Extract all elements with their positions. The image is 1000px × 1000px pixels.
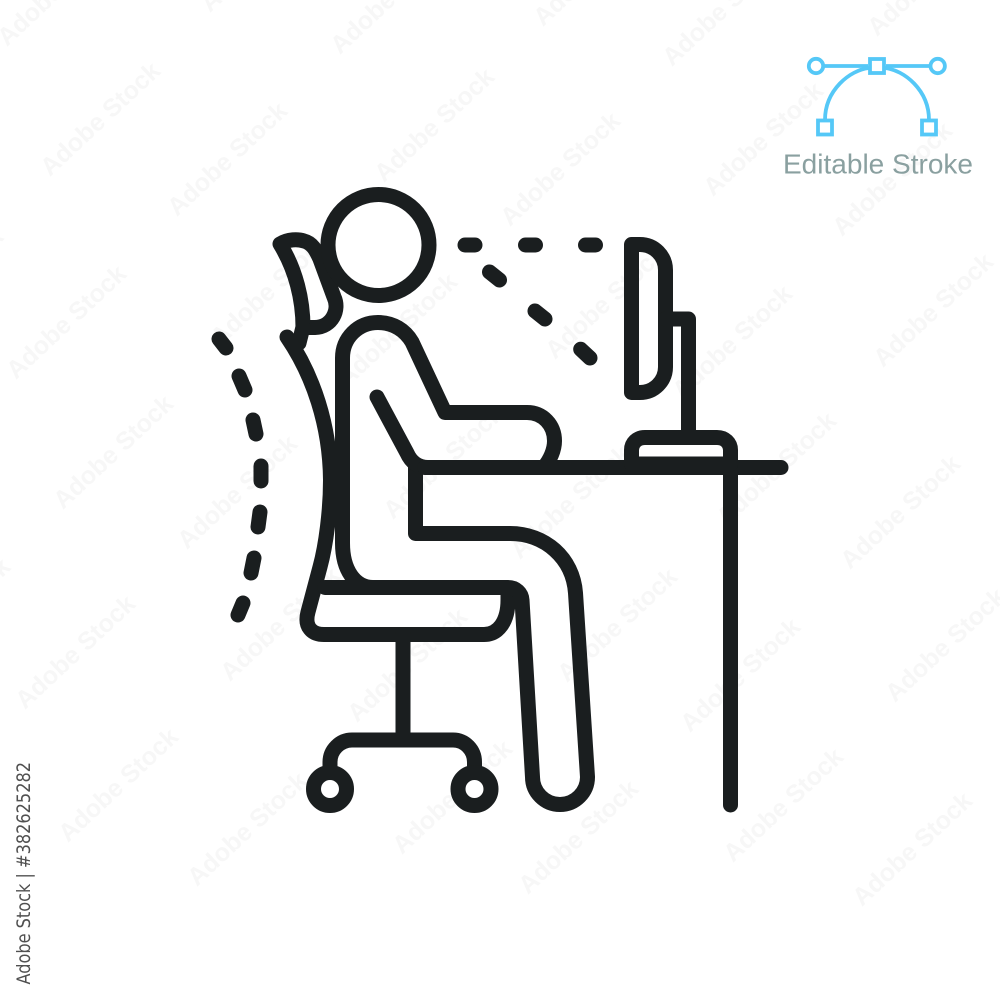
icon: monitor base xyxy=(632,438,730,464)
dashed line: horizontal eye level xyxy=(465,238,596,252)
icon: chair back and seat xyxy=(287,337,508,634)
icon: person seated at desk with good posture xyxy=(219,194,781,806)
icon: chair pole xyxy=(396,634,410,740)
icon: hair ponytail xyxy=(280,240,336,328)
repeating diagonal watermark: Adobe Stock xyxy=(868,248,999,372)
icon: torso and upper arm xyxy=(342,322,554,588)
right handle circle xyxy=(930,59,945,73)
icon: editable stroke bezier symbol xyxy=(809,59,945,134)
repeating diagonal watermark: Adobe Stock xyxy=(711,407,842,531)
repeating diagonal watermark: Adobe Stock xyxy=(332,268,463,392)
repeating diagonal watermark: Adobe Stock xyxy=(342,603,473,727)
left handle circle xyxy=(809,59,823,73)
repeating diagonal watermark: Adobe Stock xyxy=(35,57,166,181)
repeating diagonal watermark: Adobe Stock xyxy=(667,280,798,404)
icon: head xyxy=(328,194,429,296)
icon: monitor screen xyxy=(632,244,666,392)
repeating diagonal watermark: Adobe Stock xyxy=(172,430,303,554)
icon: hair to chair joint xyxy=(299,327,303,343)
top anchor square xyxy=(870,59,884,73)
repeating diagonal watermark: Adobe Stock xyxy=(162,97,293,221)
icon: chair base xyxy=(330,740,474,772)
icon: monitor stand xyxy=(666,319,688,438)
icon: right wheel xyxy=(458,772,491,806)
left anchor square xyxy=(818,120,832,134)
repeating diagonal watermark: Adobe Stock xyxy=(53,723,184,847)
repeating diagonal watermark: Adobe Stock xyxy=(205,227,336,351)
repeating diagonal watermark: Adobe Stock xyxy=(48,390,179,514)
icon: desk leg xyxy=(723,468,738,805)
repeating diagonal watermark: Adobe Stock xyxy=(505,440,636,564)
repeating diagonal watermark: Adobe Stock xyxy=(369,63,500,187)
repeating diagonal watermark: Adobe Stock xyxy=(215,562,346,686)
right anchor square xyxy=(922,120,936,134)
repeating diagonal watermark: Adobe Stock xyxy=(378,400,509,524)
repeating diagonal watermark: Adobe Stock xyxy=(552,563,683,687)
repeating diagonal watermark: Adobe Stock xyxy=(10,590,141,714)
repeating diagonal watermark: Adobe Stock xyxy=(718,743,849,867)
bezier handle lines xyxy=(824,64,930,68)
repeating diagonal watermark: Adobe Stock xyxy=(540,240,671,364)
repeating diagonal watermark: Adobe Stock xyxy=(847,787,978,911)
repeating diagonal watermark: Adobe Stock xyxy=(387,735,518,859)
repeating diagonal watermark: Adobe Stock xyxy=(513,775,644,899)
dashed line: spine curve xyxy=(219,339,261,615)
icon: desk top xyxy=(425,460,781,475)
dashed line: diagonal gaze xyxy=(490,272,590,358)
repeating diagonal watermark: Adobe Stock xyxy=(835,450,966,574)
bezier curve xyxy=(825,68,929,120)
icon: forearm xyxy=(377,397,428,468)
editable stroke label: Editable Stroke xyxy=(783,148,973,179)
icon: left wheel xyxy=(314,772,346,806)
repeating diagonal watermark: Adobe Stock xyxy=(698,77,829,201)
repeating diagonal watermark: Adobe Stock xyxy=(495,107,626,231)
vertical stock id text: Adobe Stock | #382625282 xyxy=(13,762,35,984)
repeating diagonal watermark: Adobe Stock xyxy=(827,117,958,241)
repeating diagonal watermark: Adobe Stock xyxy=(182,767,313,891)
repeating diagonal watermark: Adobe Stock xyxy=(675,613,806,737)
icon: seat top and leg xyxy=(325,468,588,804)
repeating diagonal watermark: Adobe Stock xyxy=(1,260,132,384)
